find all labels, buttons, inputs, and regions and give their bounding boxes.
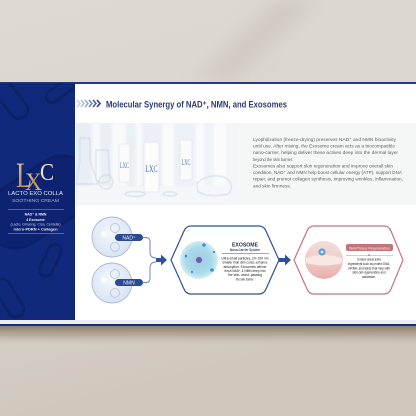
regeneration description: ingredients such as protein DNA, bbox=[348, 262, 390, 266]
NAD+ label pill: NAD⁺ bbox=[122, 236, 136, 242]
exosome description: the skin barrier. bbox=[236, 277, 254, 281]
logo: LXC monogram: C bbox=[40, 160, 54, 186]
photo: product bottles and lab glass bbox=[76, 123, 241, 205]
exosome description: the skin, world, passing bbox=[228, 273, 262, 277]
description text: until use. After mixing, the Exosome cream acts as a biocompatible bbox=[253, 144, 395, 150]
bottle centre bbox=[144, 142, 159, 192]
description text: condition, NAD⁺ and NMN help boost cellular energy (ATP), support DNA bbox=[253, 170, 403, 176]
icon: skin cross-section bbox=[305, 241, 343, 279]
exosome description: smaller than skin cores, enhance bbox=[222, 261, 268, 265]
icon: NAD+ petri dish bbox=[92, 217, 132, 257]
ingredient list: (Lacto, Ginseng, Cica, Centella) bbox=[10, 222, 61, 226]
description text: and skin firmness. bbox=[253, 184, 291, 190]
panel: regeneration hexagon bbox=[294, 226, 403, 294]
NAD+ label pill bbox=[115, 234, 143, 242]
NMN label pill: NMN bbox=[123, 281, 135, 287]
description text: beyond the skin barrier. bbox=[253, 157, 293, 163]
ingredient list bbox=[10, 212, 61, 232]
ingredient list: micro-PDRN + Collagen bbox=[14, 228, 58, 232]
exosome description bbox=[222, 256, 268, 281]
panel: poster card bbox=[0, 82, 416, 326]
panel: navy sidebar bbox=[0, 83, 75, 320]
bottle left: LXC bbox=[120, 161, 129, 170]
description text bbox=[253, 137, 403, 190]
logo: LXC monogram: L bbox=[16, 155, 32, 195]
ingredient list: 4 Exosome bbox=[26, 218, 45, 222]
regeneration description bbox=[348, 258, 390, 279]
icon: NMN petri dish bbox=[92, 263, 132, 303]
NMN label pill bbox=[115, 279, 143, 287]
regeneration label pill: Skin/Tissue Regeneration bbox=[349, 245, 390, 250]
icon: title chevrons bbox=[77, 100, 100, 107]
regeneration description: activation. bbox=[362, 275, 376, 279]
description text: Lyophilization (freeze-drying) preserves NAD⁺ and NMN bioactivity bbox=[253, 137, 397, 143]
logo: LXC monogram bbox=[16, 155, 54, 196]
exosome description: Ultra-small particles, 20~150 nm bbox=[222, 256, 268, 260]
description text: nano-carrier, helping deliver these actives deep into the dermal layer bbox=[253, 150, 398, 156]
exosome description: absorption. Exosomes deliver bbox=[224, 265, 267, 269]
exosome heading: EXOSOME bbox=[232, 242, 259, 248]
ingredient list: NAD⁺ & NMN bbox=[25, 212, 47, 216]
exosome description: fresh NAD⁺ & NMN deep into bbox=[224, 269, 266, 273]
regeneration description: mRNA, and lipids that help with bbox=[348, 266, 390, 270]
description text: Exosomes also support skin regeneration and improve overall skin bbox=[253, 163, 393, 169]
product name: LACTO EXO COLLA bbox=[8, 191, 64, 197]
panel: description background bbox=[240, 123, 416, 205]
logo: LXC monogram: X bbox=[25, 169, 42, 196]
product subtitle: SOOTHING CREAM bbox=[12, 198, 60, 203]
exosome subheading: Nano-Carrier System bbox=[230, 248, 260, 252]
arrow: into exosome bbox=[156, 254, 167, 266]
regeneration description: skin cell regeneration and bbox=[352, 271, 386, 275]
connector lines bbox=[143, 238, 156, 282]
panel: exosome hexagon bbox=[171, 226, 279, 294]
bottle right bbox=[181, 141, 191, 179]
bottle right: LXC bbox=[182, 158, 190, 167]
description text: repair, and promot collagen synthesis, improving wrinkles, inflammation, bbox=[253, 177, 403, 183]
bottle centre: LXC bbox=[146, 164, 158, 174]
arrow: into regeneration bbox=[279, 254, 291, 266]
title: Molecular Synergy of NAD⁺, NMN, and Exosomes bbox=[106, 100, 287, 110]
icon: exosome sphere bbox=[180, 241, 218, 279]
regeneration description: Contains various active bbox=[357, 258, 381, 262]
bottle left bbox=[119, 144, 130, 182]
